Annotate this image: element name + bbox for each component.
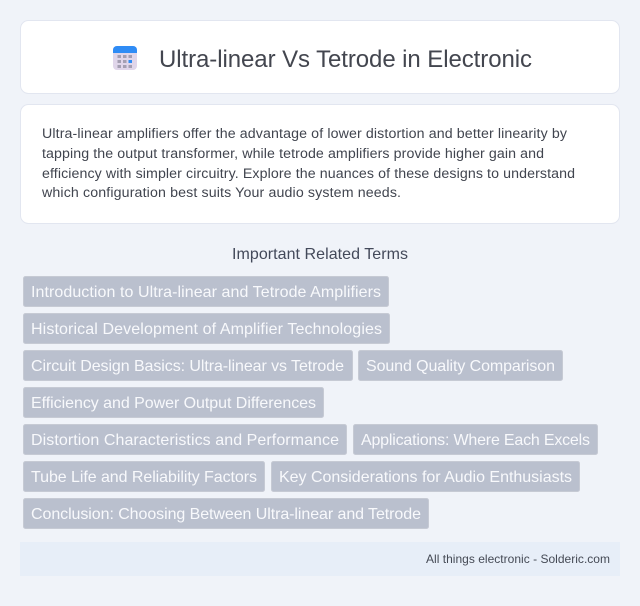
- tag: tube life: [24, 462, 264, 492]
- title: Ultra-linear Vs Tetrode in Electronic: [159, 46, 532, 73]
- tag: sound quality: [358, 350, 562, 380]
- tag list: [24, 276, 598, 528]
- tag: distortion: Distortion Characteristics and Performance: [31, 432, 339, 449]
- icon: calendar: [113, 46, 137, 70]
- tag: conclusion: Conclusion: Choosing Between Ultra-linear and Tetrode: [31, 506, 421, 523]
- heading: important related terms: Important Related Terms: [232, 246, 408, 263]
- tag: key considerations: [272, 462, 580, 492]
- tag: historical development: [24, 314, 390, 344]
- tag: distortion: [24, 424, 346, 454]
- panel: title header: [20, 20, 620, 94]
- tag: efficiency: [24, 388, 324, 418]
- text block: summary: which configuration best suits Your audio system needs.: [41, 185, 401, 201]
- footer text: All things electronic - Solderic.com: [426, 552, 610, 566]
- footer: [20, 542, 620, 576]
- tag: conclusion: [24, 498, 428, 528]
- tag: efficiency: Efficiency and Power Output Differences: [31, 395, 316, 412]
- tag: historical development: Historical Development of Amplifier Technologies: [31, 321, 382, 338]
- tag: introduction: [24, 276, 388, 306]
- tag: circuit design: Circuit Design Basics: Ultra-linear vs Tetrode: [31, 358, 344, 375]
- text block: summary: efficiency with simpler circuitry. Explore the nuances of these designs to understand: [42, 166, 575, 182]
- text block: summary: [41, 126, 575, 201]
- text block: summary: Ultra-linear amplifiers offer the advantage of lower distortion and better linearity by: [42, 126, 568, 142]
- panel: summary text: [20, 104, 620, 224]
- tag: introduction: Introduction to Ultra-linear and Tetrode Amplifiers: [31, 284, 381, 301]
- text block: summary: tapping the output transformer, while tetrode amplifiers provide higher gain and: [42, 146, 544, 162]
- tag: applications: [354, 424, 598, 454]
- tag: tube life: Tube Life and Reliability Factors: [31, 469, 257, 486]
- tag: applications: Applications: Where Each Excels: [361, 432, 590, 449]
- tag: sound quality: Sound Quality Comparison: [366, 358, 555, 375]
- tag: circuit design: [24, 350, 352, 380]
- tag: key considerations: Key Considerations for Audio Enthusiasts: [279, 469, 572, 486]
